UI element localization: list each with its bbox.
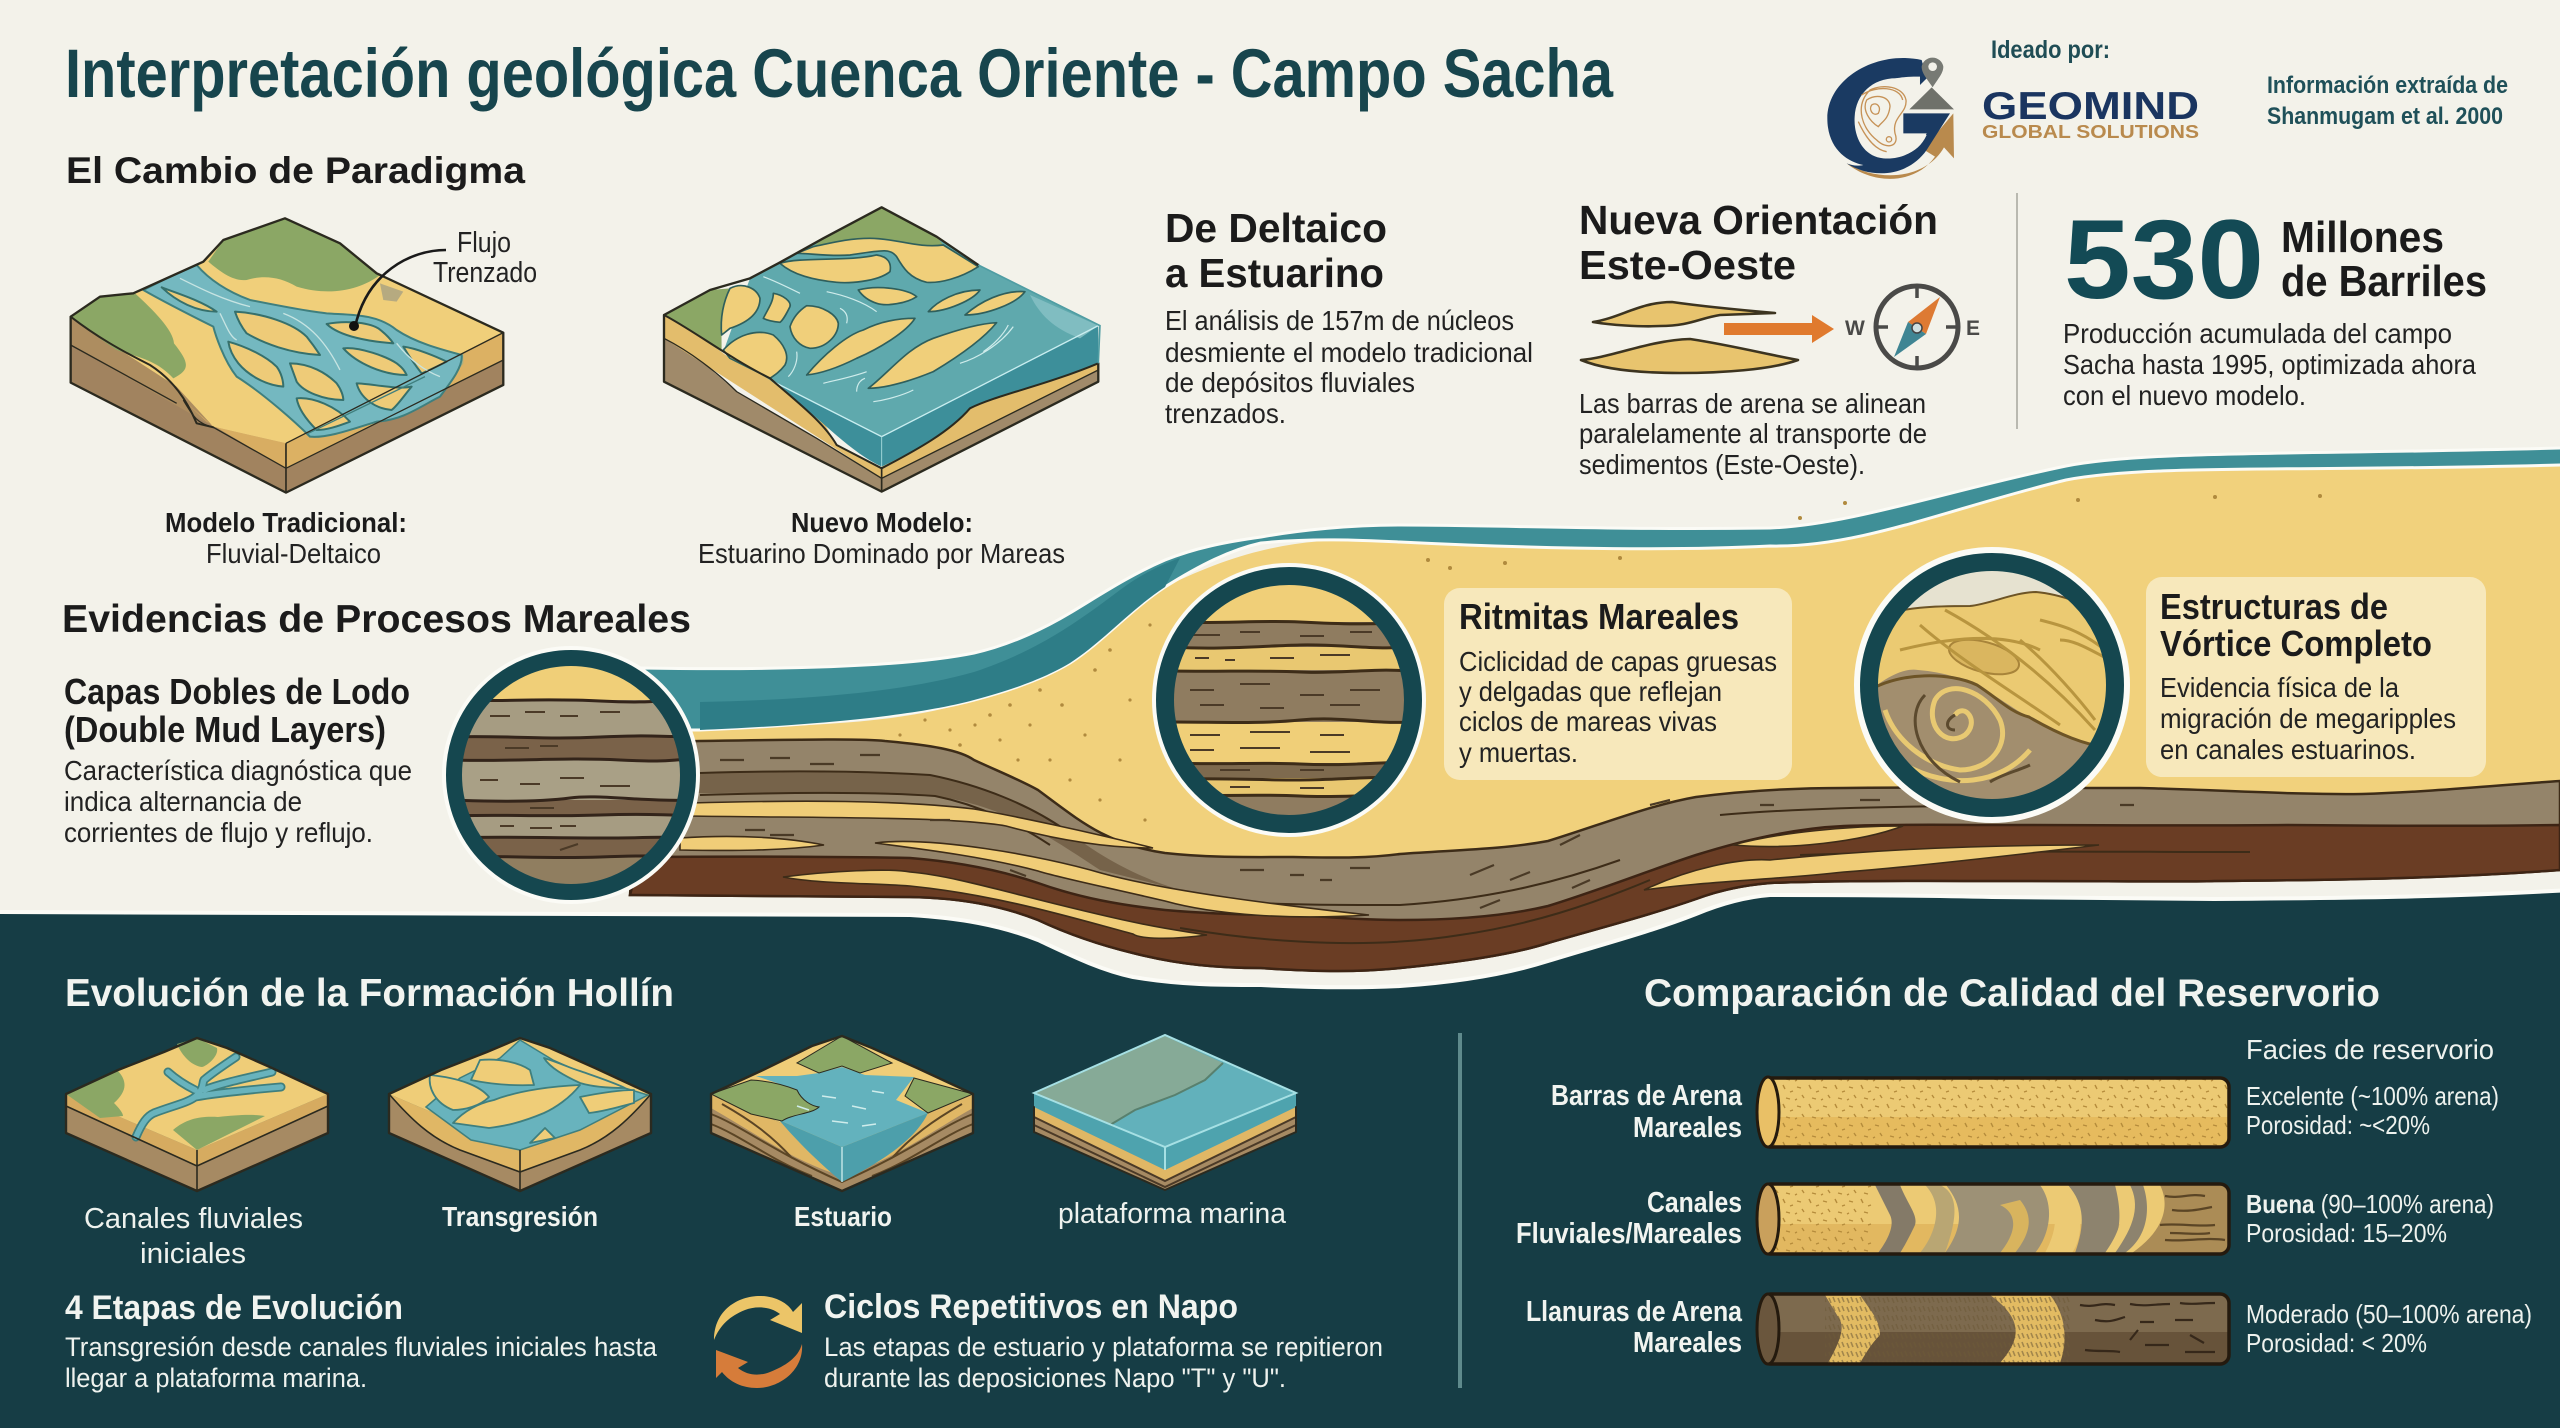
- quality text: [2246, 1189, 2494, 1248]
- panel: nueva orientacion este-oeste: [1579, 197, 1980, 480]
- callout label: [433, 227, 537, 289]
- row label: Barras de Arena: [1551, 1080, 1743, 1112]
- source note: Shanmugam et al. 2000: [2267, 103, 2503, 130]
- leader line: [355, 250, 446, 327]
- heading: a Estuarino: [1165, 250, 1384, 296]
- heading: [1165, 205, 1387, 296]
- core cylinder: [1757, 1184, 2229, 1254]
- callout label: Flujo: [457, 227, 511, 259]
- inset circle: double mud layers: [442, 646, 700, 904]
- caption: modelo tradicional: [165, 507, 407, 569]
- body text: sedimentos (Este-Oeste).: [1579, 449, 1865, 480]
- heading: [1579, 197, 1938, 288]
- divider: [1458, 1033, 1462, 1388]
- mud flecks: [720, 755, 2134, 908]
- stage labels: plataforma marina: [1058, 1198, 1287, 1230]
- core cylinder: [1757, 1294, 2229, 1364]
- body text: Las barras de arena se alinean: [1579, 388, 1926, 419]
- source note: Información extraída de: [2267, 72, 2508, 99]
- quality text: Porosidad: 15–20%: [2246, 1218, 2447, 1248]
- stage labels: iniciales: [140, 1238, 246, 1270]
- text box: estructuras de vortice completo: [2146, 577, 2486, 777]
- logo wordmark: GEOMIND: [1982, 85, 2199, 128]
- stage block: plataforma marina: [1034, 1035, 1296, 1190]
- icon: G mark: [1827, 58, 1954, 179]
- heading: Estructuras de: [2160, 586, 2388, 627]
- row label: Canales: [1647, 1187, 1742, 1219]
- text block: capas dobles de lodo: [64, 671, 412, 848]
- row label: [1551, 1080, 1743, 1144]
- caption: nuevo modelo: [698, 507, 1065, 569]
- row: barras de arena: [1551, 1077, 2499, 1147]
- icon: compass: W: [1845, 317, 1865, 340]
- panel: 530 millones de barriles: [2063, 197, 2487, 411]
- heading: evidencias: Evidencias de Procesos Mareales: [62, 598, 691, 641]
- big number: 530: [2064, 197, 2264, 322]
- subheading: Capas Dobles de Lodo: [64, 671, 410, 712]
- subheading: [64, 671, 410, 750]
- text block: ciclos repetitivos: [824, 1288, 1383, 1393]
- heading: evolucion: Evolución de la Formación Hollín: [65, 972, 674, 1015]
- diagram: modelo tradicional block: [71, 218, 503, 493]
- panel: de deltaico a estuarino: [1165, 205, 1533, 429]
- body: Ciclicidad de capas gruesas: [1459, 646, 1777, 677]
- callout label: Trenzado: [433, 257, 537, 289]
- quality text: [2246, 1299, 2532, 1358]
- core cylinder: [1757, 1077, 2229, 1147]
- heading: Vórtice Completo: [2160, 623, 2432, 664]
- body: Característica diagnóstica que: [64, 755, 412, 786]
- sand body: [630, 463, 2560, 971]
- body: corrientes de flujo y reflujo.: [64, 817, 373, 848]
- text block: 4 etapas de evolucion: [65, 1289, 658, 1393]
- arrow: transport direction: [1724, 315, 1834, 343]
- stage block: transgresion: [389, 1038, 651, 1191]
- quality text: Buena (90–100% arena): [2246, 1189, 2494, 1219]
- icon: compass: [1845, 286, 1980, 368]
- row label: Mareales: [1633, 1112, 1742, 1144]
- body: [64, 755, 412, 848]
- body text: con el nuevo modelo.: [2063, 380, 2306, 411]
- text block: ciclos repetitivos: Ciclos Repetitivos en Napo: [824, 1288, 1238, 1326]
- row: llanuras de arena: [1526, 1294, 2532, 1364]
- row label: [1526, 1296, 1743, 1359]
- subheading: (Double Mud Layers): [64, 709, 386, 750]
- body text: de depósitos fluviales: [1165, 367, 1415, 398]
- body: y delgadas que reflejan: [1459, 676, 1722, 707]
- body text: Sacha hasta 1995, optimizada ahora: [2063, 349, 2476, 380]
- body: ciclos de mareas vivas: [1459, 706, 1717, 737]
- teal water layer: [640, 448, 2560, 730]
- heading: El Cambio de Paradigma: El Cambio de Paradigma: [66, 150, 525, 191]
- row label: Mareales: [1633, 1327, 1742, 1359]
- quality text: [2246, 1081, 2499, 1140]
- body text: paralelamente al transporte de: [1579, 418, 1927, 449]
- unit label: Millones: [2281, 213, 2444, 262]
- row label: [1516, 1187, 1742, 1250]
- mud layer: [630, 739, 2560, 971]
- heading: [2160, 586, 2432, 664]
- logo tagline: GLOBAL SOLUTIONS: [1982, 122, 2199, 142]
- body: [2160, 672, 2456, 765]
- sand lenses: [680, 801, 2099, 938]
- stage labels: Estuario: [794, 1201, 892, 1232]
- title: Interpretación geológica Cuenca Oriente - Campo Sacha: [65, 35, 1614, 112]
- legend heading: Facies de reservorio: [2246, 1034, 2494, 1065]
- body text: Producción acumulada del campo: [2063, 318, 2452, 349]
- divider: [2016, 193, 2018, 429]
- sand specks: [898, 494, 2322, 822]
- heading: Ritmitas Mareales: [1459, 596, 1739, 637]
- body: en canales estuarinos.: [2160, 734, 2416, 765]
- heading: Nueva Orientación: [1579, 197, 1938, 243]
- heading: Este-Oeste: [1579, 242, 1796, 288]
- quality text: Porosidad: < 20%: [2246, 1328, 2427, 1358]
- icon: repeating cycle arrows: [714, 1296, 802, 1388]
- source note: [2267, 72, 2508, 130]
- quality text: Excelente (~100% arena): [2246, 1081, 2499, 1111]
- leader dot: [349, 321, 359, 331]
- caption: nuevo modelo: Nuevo Modelo:: [791, 507, 973, 538]
- unit label: [2281, 213, 2487, 306]
- body text: [2063, 318, 2476, 411]
- strata lines: [700, 772, 2250, 943]
- text block: ciclos repetitivos: durante las deposiciones Napo "T" y "U".: [824, 1363, 1286, 1393]
- heading: De Deltaico: [1165, 205, 1387, 251]
- icon: sand bars: [1581, 302, 1798, 373]
- row label: Fluviales/Mareales: [1516, 1218, 1742, 1250]
- row label: Llanuras de Arena: [1526, 1296, 1743, 1328]
- caption: modelo tradicional: Fluvial-Deltaico: [206, 538, 381, 569]
- darker mud band: [640, 772, 1180, 890]
- panel: dark lower band: [0, 890, 2560, 1428]
- logo: GEOMIND: [1827, 58, 2199, 179]
- stage labels: Transgresión: [442, 1201, 598, 1232]
- text block: 4 etapas de evolucion: llegar a plataforma marina.: [65, 1363, 367, 1393]
- callout: flujo trenzado: [349, 227, 537, 331]
- body: y muertas.: [1459, 737, 1578, 768]
- quality text: Porosidad: ~<20%: [2246, 1110, 2430, 1140]
- text box: ritmitas mareales: [1444, 588, 1792, 780]
- heading: comparacion: Comparación de Calidad del Reservorio: [1644, 972, 2380, 1015]
- body text: [1165, 305, 1533, 429]
- body: indica alternancia de: [64, 786, 302, 817]
- stage block: canales fluviales: [66, 1038, 328, 1191]
- sediment cross-section: [630, 448, 2560, 971]
- body text: trenzados.: [1165, 398, 1286, 429]
- unit label: de Barriles: [2281, 257, 2487, 306]
- body text: [1579, 388, 1927, 480]
- caption: modelo tradicional: Modelo Tradicional:: [165, 507, 407, 538]
- credit: ideado por: Ideado por:: [1991, 36, 2110, 64]
- inset circle: ritmitas: [1152, 563, 1426, 837]
- caption: nuevo modelo: Estuarino Dominado por Mareas: [698, 538, 1065, 569]
- text block: 4 etapas de evolucion: Transgresión desde canales fluviales iniciales hasta: [65, 1332, 658, 1362]
- inset circle: vortex structures: [1854, 547, 2130, 823]
- diagram: nuevo modelo block: [664, 207, 1100, 492]
- body text: desmiente el modelo tradicional: [1165, 337, 1533, 368]
- body text: El análisis de 157m de núcleos: [1165, 305, 1514, 336]
- stage block: estuario: [711, 1036, 973, 1191]
- stage labels: [84, 1198, 1287, 1270]
- text block: 4 etapas de evolucion: 4 Etapas de Evolución: [65, 1289, 403, 1327]
- stage labels: Canales fluviales: [84, 1203, 303, 1235]
- body: migración de megaripples: [2160, 703, 2456, 734]
- body: [1459, 646, 1777, 768]
- text block: ciclos repetitivos: Las etapas de estuario y plataforma se repitieron: [824, 1332, 1383, 1362]
- body: Evidencia física de la: [2160, 672, 2399, 703]
- row: canales fluviales/mareales: [1516, 1184, 2494, 1254]
- icon: compass: E: [1966, 317, 1980, 340]
- brown base layer: [630, 825, 2560, 971]
